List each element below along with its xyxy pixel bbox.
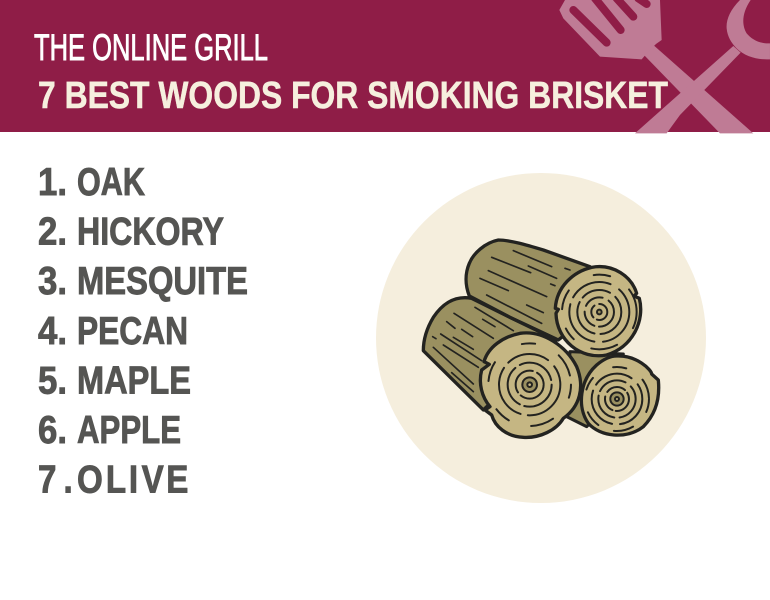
top log end <box>555 267 641 356</box>
icon: crossed spatula and fork <box>559 0 770 133</box>
item 7: 7. <box>38 457 73 501</box>
back log body <box>466 240 597 340</box>
item 1 <box>38 161 145 204</box>
icon: stack of logs <box>423 240 659 437</box>
list of woods <box>38 161 248 501</box>
left log body <box>423 298 557 410</box>
item 3: 3. <box>38 260 67 303</box>
grain lines <box>433 251 570 392</box>
item 1: 1. <box>38 161 67 204</box>
item 6: APPLE <box>77 409 181 452</box>
front log end <box>480 333 581 437</box>
item 5: MAPLE <box>77 360 191 402</box>
right log body <box>567 352 623 427</box>
item 2: HICKORY <box>77 210 224 254</box>
item 7: OLIVE <box>77 457 188 501</box>
item 3: MESQUITE <box>77 260 248 303</box>
item 2: 2. <box>38 210 67 254</box>
item 4: PECAN <box>77 310 188 353</box>
item 6: 6. <box>38 409 67 452</box>
item 4 <box>38 310 188 353</box>
header banner <box>0 0 770 133</box>
illustration circle background <box>376 173 706 503</box>
main heading: 7 BEST WOODS FOR SMOKING BRISKET <box>38 75 668 117</box>
item 5 <box>38 360 191 402</box>
item 6 <box>38 409 181 452</box>
item 5: 5. <box>38 360 67 402</box>
right log end <box>581 356 659 435</box>
item 4: 4. <box>38 310 67 353</box>
item 2 <box>38 210 224 254</box>
brand title: THE ONLINE GRILL <box>34 27 268 68</box>
item 1: OAK <box>77 161 145 204</box>
